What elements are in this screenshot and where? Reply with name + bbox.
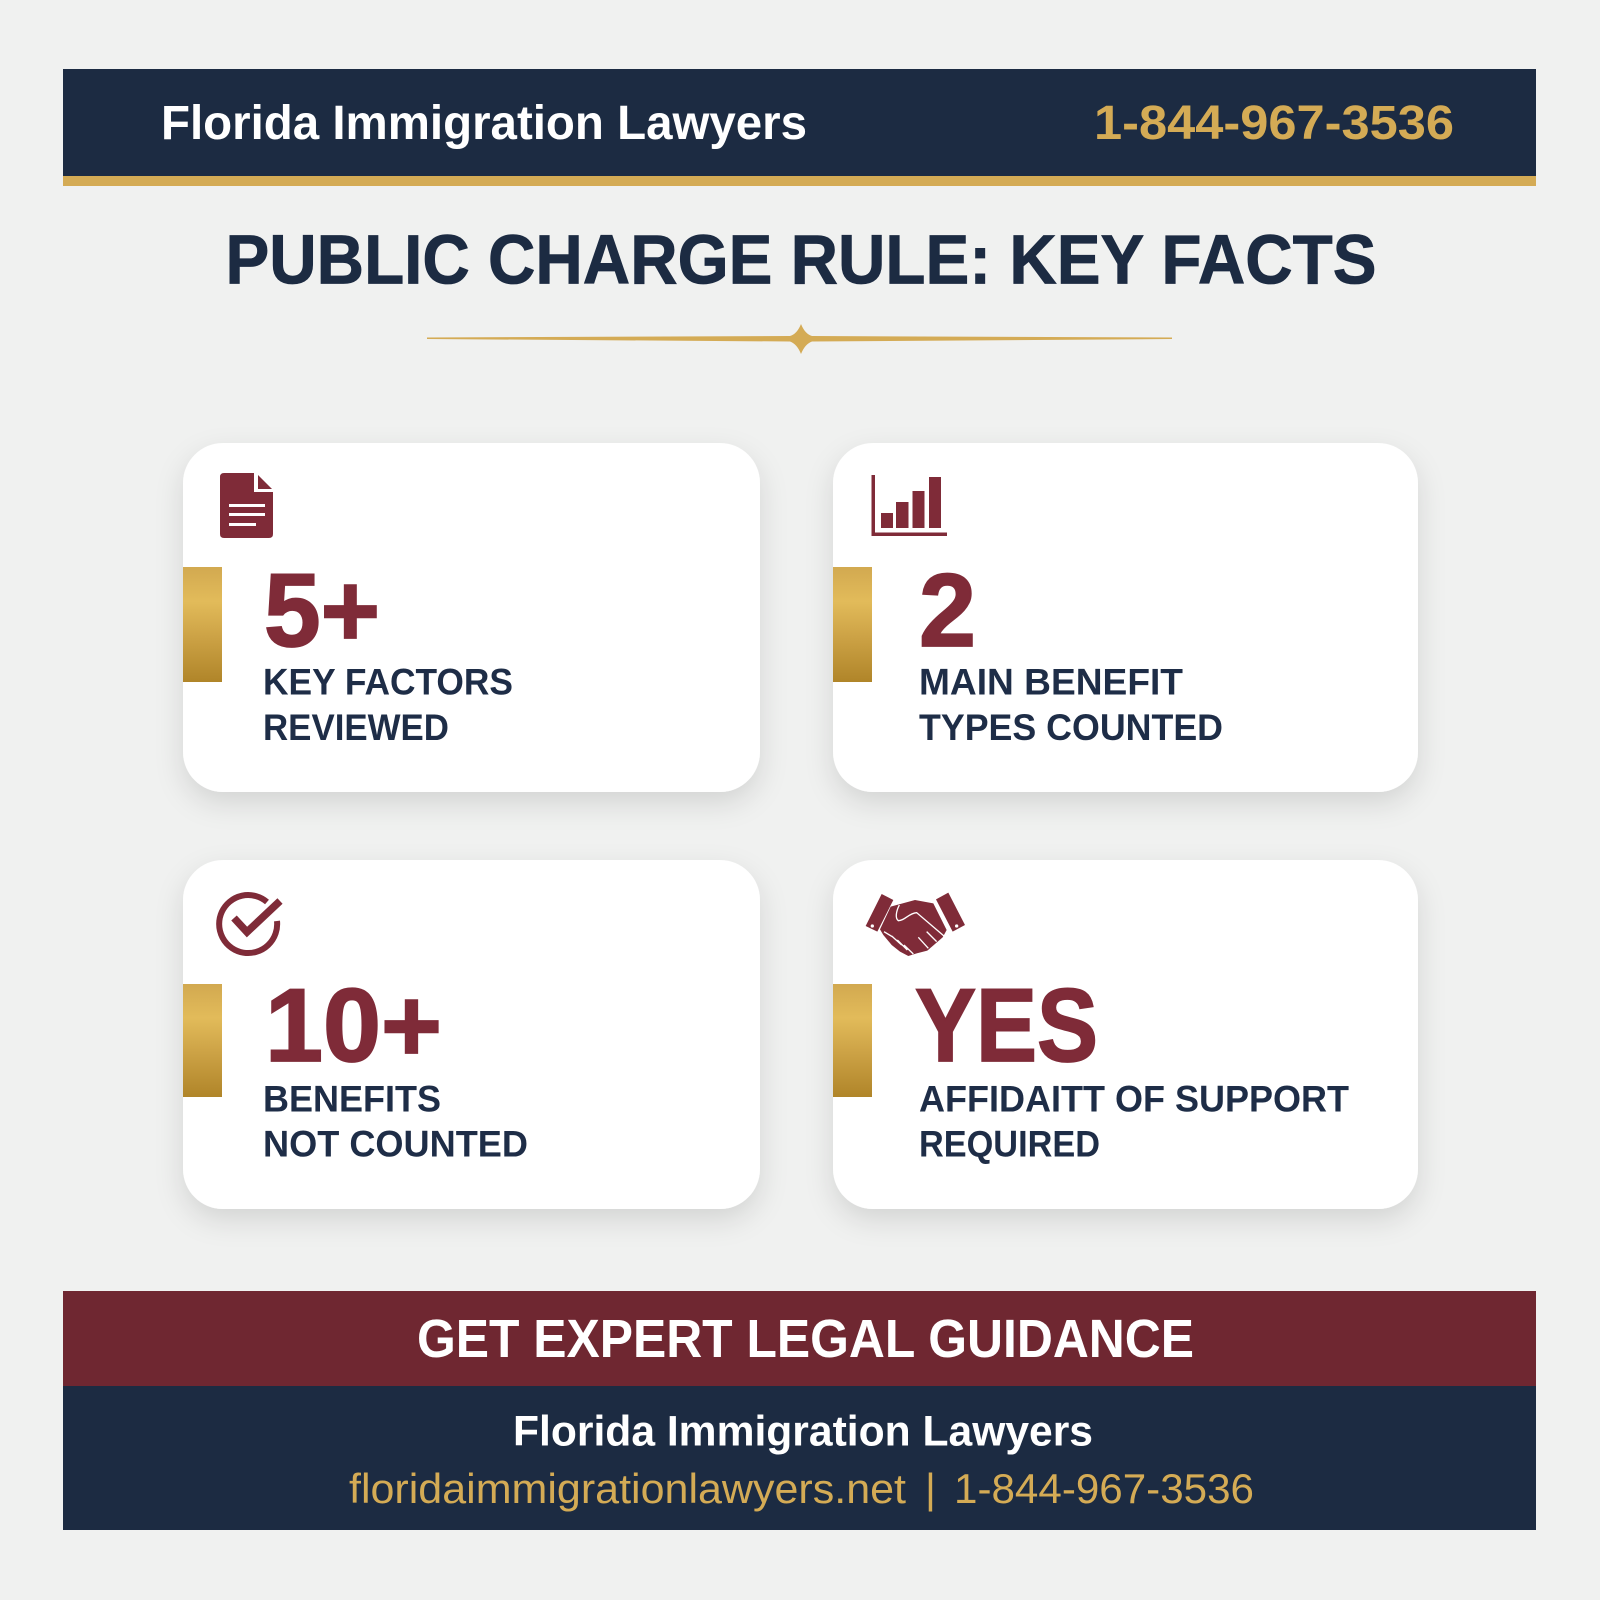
header bar	[63, 69, 1536, 186]
stat label: MAIN BENEFIT	[919, 660, 1183, 702]
panel: affidavit of support	[833, 860, 1418, 1209]
stat label: BENEFITS	[263, 1078, 441, 1120]
icon: bar chart	[872, 475, 947, 536]
title: PUBLIC CHARGE RULE: KEY FACTS	[226, 220, 1376, 298]
stat label: REQUIRED	[919, 1122, 1100, 1164]
stat label	[263, 1078, 528, 1164]
header phone number: 1-844-967-3536	[1094, 97, 1454, 150]
footer website: floridaimmigrationlawyers.net	[349, 1465, 906, 1512]
stat label: AFFIDAITT OF SUPPORT	[919, 1078, 1349, 1120]
icon: document	[220, 473, 273, 538]
panel: key factors	[183, 443, 760, 792]
footer call to action banner	[63, 1291, 1536, 1386]
icon: handshake	[866, 893, 965, 956]
icon: check circle	[219, 895, 280, 953]
stat label: TYPES COUNTED	[919, 706, 1223, 748]
stat value: 5+	[264, 553, 380, 669]
stat value: YES	[915, 968, 1098, 1084]
footer contact panel	[63, 1386, 1536, 1530]
stat label	[263, 660, 513, 748]
call to action heading: GET EXPERT LEGAL GUIDANCE	[417, 1309, 1194, 1369]
stat label: REVIEWED	[263, 706, 449, 748]
header firm name: Florida Immigration Lawyers	[161, 97, 807, 150]
stat label: KEY FACTORS	[263, 660, 513, 702]
footer firm name: Florida Immigration Lawyers	[513, 1408, 1093, 1456]
stat label: NOT COUNTED	[263, 1122, 528, 1164]
footer phone: 1-844-967-3536	[954, 1465, 1254, 1512]
footer separator: |	[925, 1465, 936, 1512]
panel: benefit types	[833, 443, 1418, 792]
stat value: 2	[919, 553, 976, 669]
panel: benefits not counted	[183, 860, 760, 1209]
stat value: 10+	[265, 968, 442, 1084]
title divider with diamond	[427, 324, 1172, 354]
stat label	[919, 1078, 1349, 1164]
stat label	[919, 660, 1223, 748]
